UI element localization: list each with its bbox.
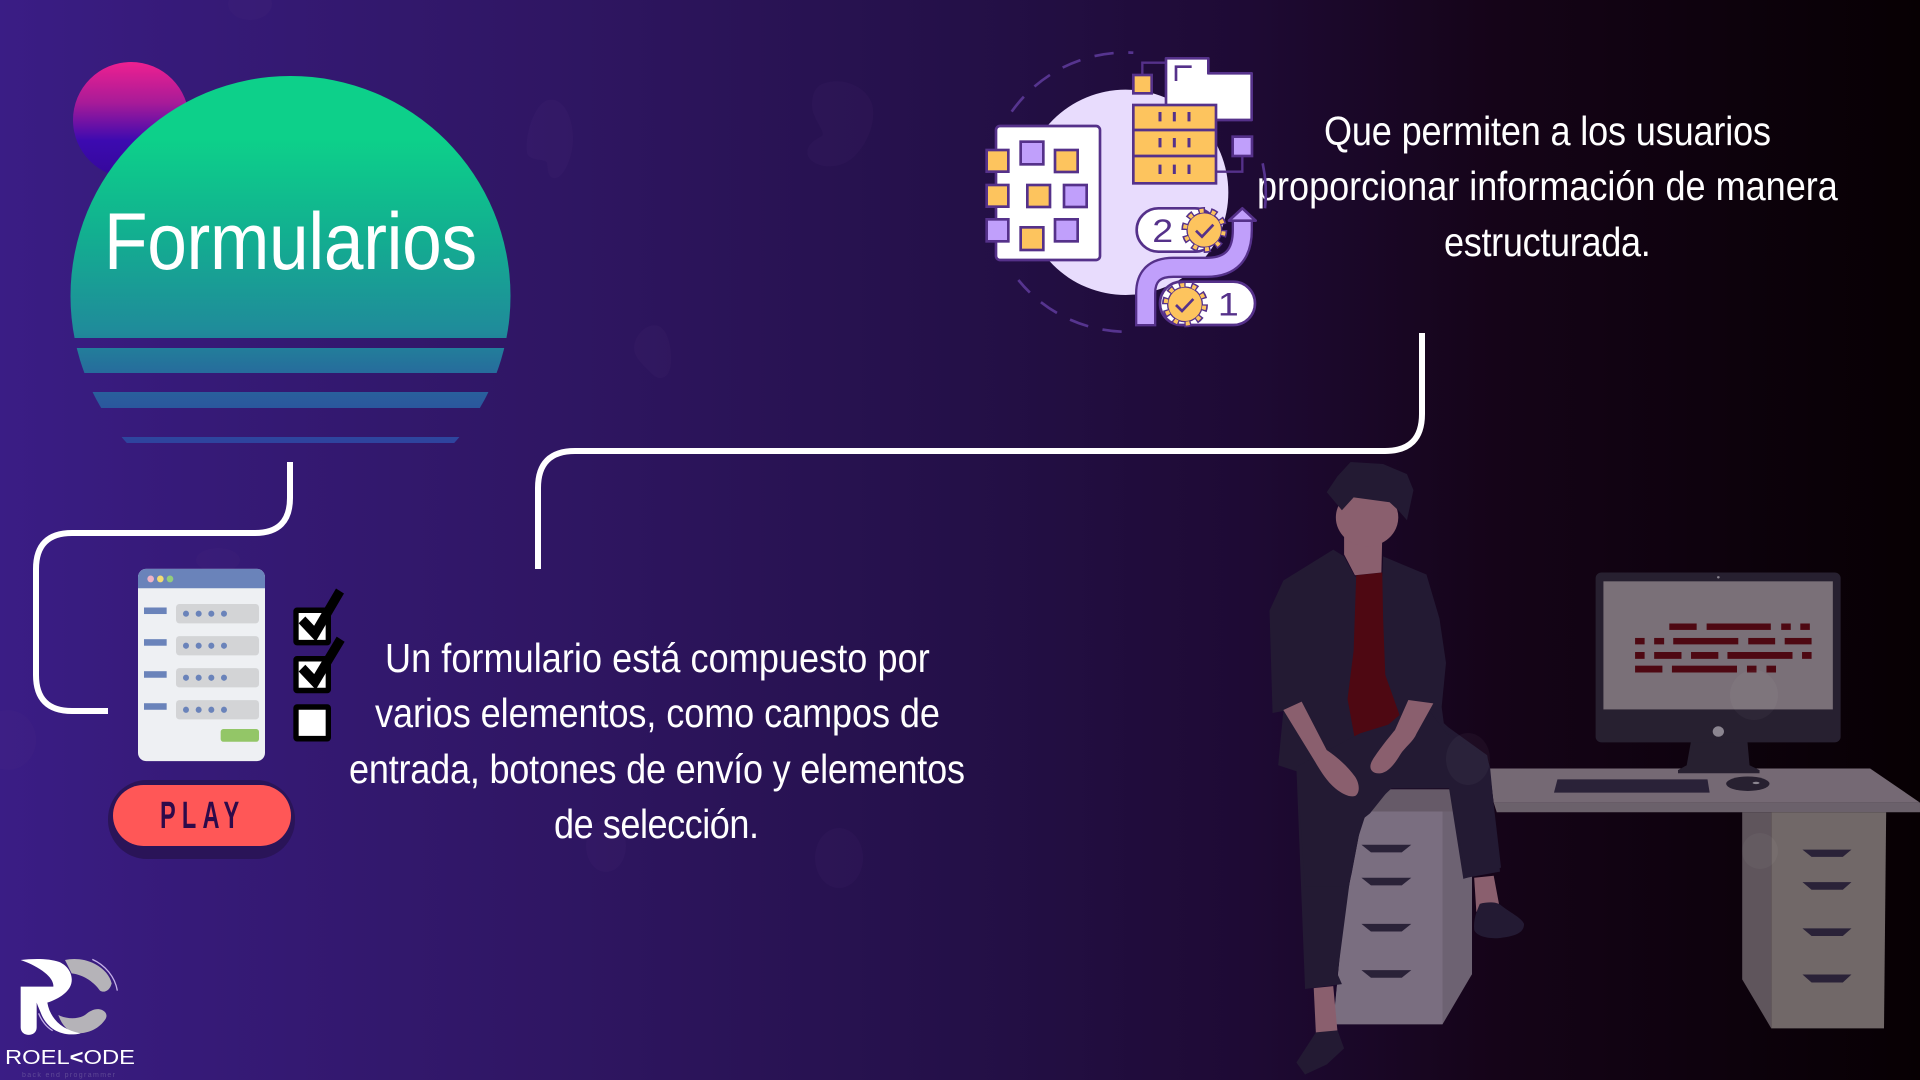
desk top bbox=[1489, 768, 1920, 812]
left drawer unit bbox=[1333, 789, 1472, 1024]
icon: structured data workflow bbox=[987, 52, 1266, 332]
code lines on screen bbox=[1635, 623, 1812, 672]
empty box bbox=[296, 707, 328, 739]
red shirt bbox=[1348, 572, 1400, 751]
step 1 pill: 1 bbox=[1218, 287, 1239, 323]
right arm bbox=[1370, 700, 1433, 773]
form card bbox=[138, 569, 265, 761]
play button: PLAY bbox=[160, 793, 245, 836]
decorative faint blobs bbox=[0, 0, 873, 888]
hair bbox=[1327, 462, 1413, 520]
logo R mark bbox=[21, 959, 81, 1035]
person bbox=[1269, 462, 1524, 1075]
folder bbox=[1166, 58, 1252, 120]
step 2 gear bbox=[1185, 211, 1224, 249]
description text right: estructurada. bbox=[1444, 220, 1651, 266]
right drawer unit bbox=[1742, 812, 1886, 1028]
panel squares bbox=[987, 142, 1087, 250]
white panel bbox=[996, 126, 1100, 260]
ankles bbox=[1314, 986, 1338, 1033]
logo C mark bbox=[58, 959, 112, 1033]
logo tagline: back end programmer bbox=[22, 1072, 116, 1079]
step 2 pill: 2 bbox=[1152, 213, 1173, 249]
sun shape with bands bbox=[70, 76, 510, 443]
description text right: proporcionar información de manera bbox=[1257, 164, 1838, 210]
shoes bbox=[1296, 1030, 1344, 1075]
form field rows bbox=[144, 604, 259, 719]
purple node square bbox=[1217, 137, 1252, 172]
title: Formularios bbox=[104, 197, 477, 287]
mouse bbox=[1726, 777, 1770, 791]
description text left: entrada, botones de envío y elementos bbox=[349, 747, 965, 793]
backing circle bbox=[1023, 90, 1228, 295]
legs lower bbox=[1296, 711, 1501, 989]
neck and head bbox=[1344, 532, 1382, 575]
step 2 pill bbox=[1137, 208, 1217, 252]
left arm bbox=[1283, 702, 1359, 796]
logo bbox=[5, 959, 135, 1079]
description text left bbox=[349, 636, 965, 848]
small node square bbox=[1133, 63, 1166, 93]
pink circle bbox=[73, 62, 189, 178]
illustration: desk bbox=[1333, 572, 1920, 1028]
logo wordmark: ROEL <ODE bbox=[5, 1047, 135, 1069]
description text left: varios elementos, como campos de bbox=[375, 691, 940, 737]
rising arrow bbox=[1146, 208, 1256, 326]
submit button bbox=[221, 729, 259, 742]
step 1 gear bbox=[1166, 285, 1204, 324]
description text right bbox=[1257, 109, 1838, 266]
monitor bbox=[1596, 572, 1841, 773]
checked box 1 bbox=[296, 591, 340, 643]
server stack bbox=[1133, 105, 1216, 183]
dashed orbit bbox=[1012, 52, 1266, 332]
description text left: Un formulario está compuesto por bbox=[385, 636, 930, 682]
form header bbox=[138, 569, 265, 588]
step 1 pill bbox=[1160, 282, 1255, 325]
keyboard bbox=[1554, 779, 1710, 793]
connector: title to form bbox=[36, 462, 290, 711]
window dots bbox=[147, 575, 173, 582]
description text left: de selección. bbox=[554, 802, 759, 848]
hips and thigh bbox=[1297, 712, 1500, 887]
faint highlights bbox=[1446, 670, 1778, 869]
jacket bbox=[1269, 550, 1446, 771]
logo accent arcs bbox=[39, 959, 117, 1031]
checkboxes bbox=[296, 591, 341, 739]
checked box 2 bbox=[296, 639, 341, 690]
description text right: Que permiten a los usuarios bbox=[1324, 109, 1771, 155]
connector: description to right text bbox=[538, 333, 1422, 569]
form illustration bbox=[138, 569, 265, 761]
play button bbox=[108, 780, 295, 859]
